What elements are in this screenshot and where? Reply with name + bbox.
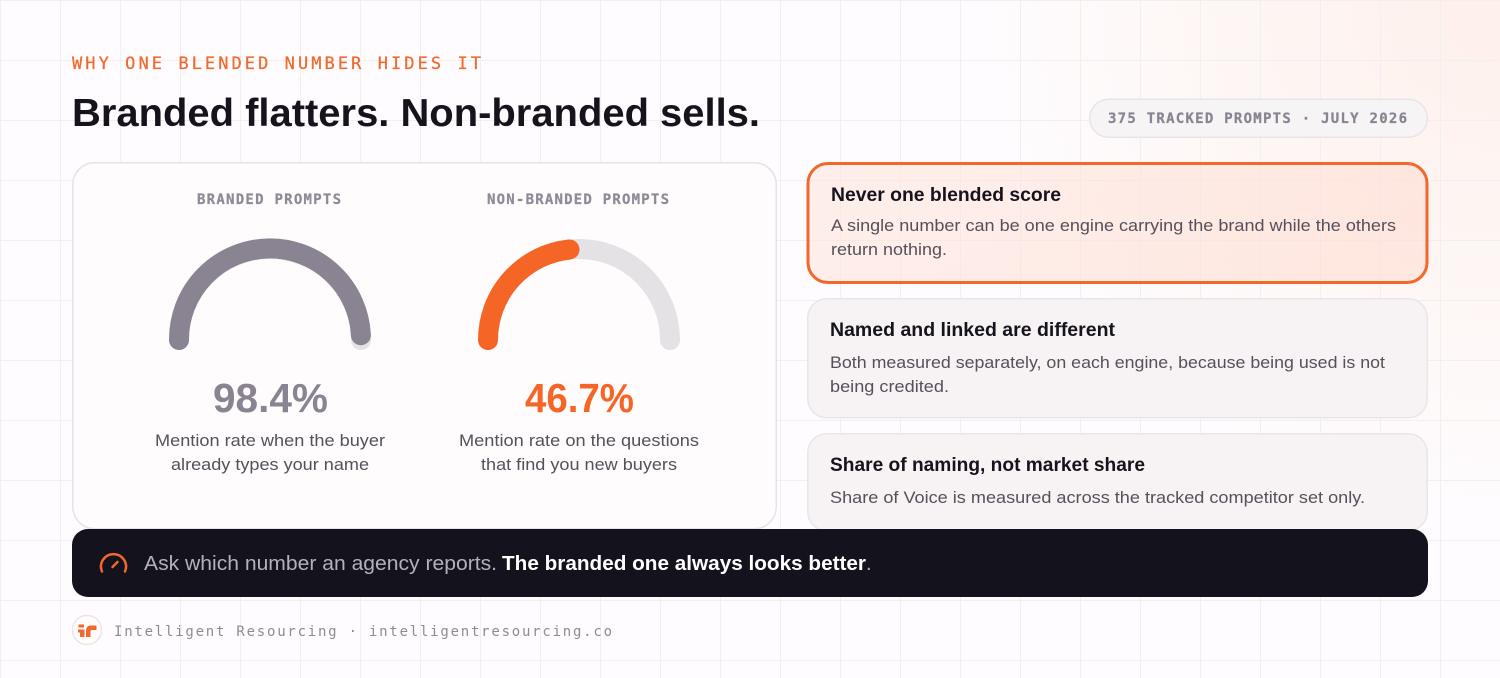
gauge: branded prompts: BRANDED PROMPTS [197, 192, 341, 208]
card: named and linked: Named and linked are different [830, 320, 1116, 341]
gauge: non-branded prompts: 46.7% [525, 375, 634, 421]
card: named and linked: Both measured separately, on each engine, because being used is not [830, 353, 1385, 372]
badge: tracked prompts: 375 TRACKED PROMPTS · JULY 2026 [1108, 111, 1407, 127]
callout bar [72, 529, 1428, 597]
callout text: Ask which number an agency reports. [144, 553, 497, 575]
badge: tracked prompts [1090, 99, 1427, 137]
card: never one blended score: A single number can be one engine carrying the brand while the others [831, 216, 1396, 235]
gauge: branded prompts: Mention rate when the buyer [155, 431, 385, 450]
callout text: . [866, 553, 872, 575]
title: Branded flatters. Non-branded sells. [72, 92, 760, 135]
eyebrow: WHY ONE BLENDED NUMBER HIDES IT [72, 54, 481, 74]
callout text: The branded one always looks better [502, 553, 866, 575]
gauge: non-branded prompts [459, 192, 699, 474]
callout text [144, 553, 872, 575]
panel: gauges [73, 163, 776, 529]
card: share of naming: Share of naming, not market share [830, 455, 1145, 476]
icon: speedometer [101, 554, 126, 572]
footer: Intelligent Resourcing · intelligentresourcing.co [114, 624, 612, 640]
card: never one blended score [808, 164, 1427, 282]
gauge: branded prompts [155, 192, 385, 474]
card: named and linked [808, 299, 1427, 418]
gauge: branded prompts: already types your name [171, 455, 369, 474]
card: named and linked: being credited. [830, 377, 949, 396]
card: never one blended score: return nothing. [831, 240, 947, 259]
card: share of naming [808, 434, 1427, 531]
gauge: non-branded prompts: NON-BRANDED PROMPTS [487, 192, 669, 208]
card: share of naming: Share of Voice is measured across the tracked competitor set only. [830, 488, 1365, 507]
icon: logo [72, 616, 102, 644]
footer [72, 616, 612, 644]
card: never one blended score: Never one blended score [831, 185, 1061, 206]
gauge: branded prompts: 98.4% [213, 375, 328, 421]
gauge: non-branded prompts: Mention rate on the questions [459, 431, 699, 450]
gauge: non-branded prompts: that find you new buyers [481, 455, 677, 474]
